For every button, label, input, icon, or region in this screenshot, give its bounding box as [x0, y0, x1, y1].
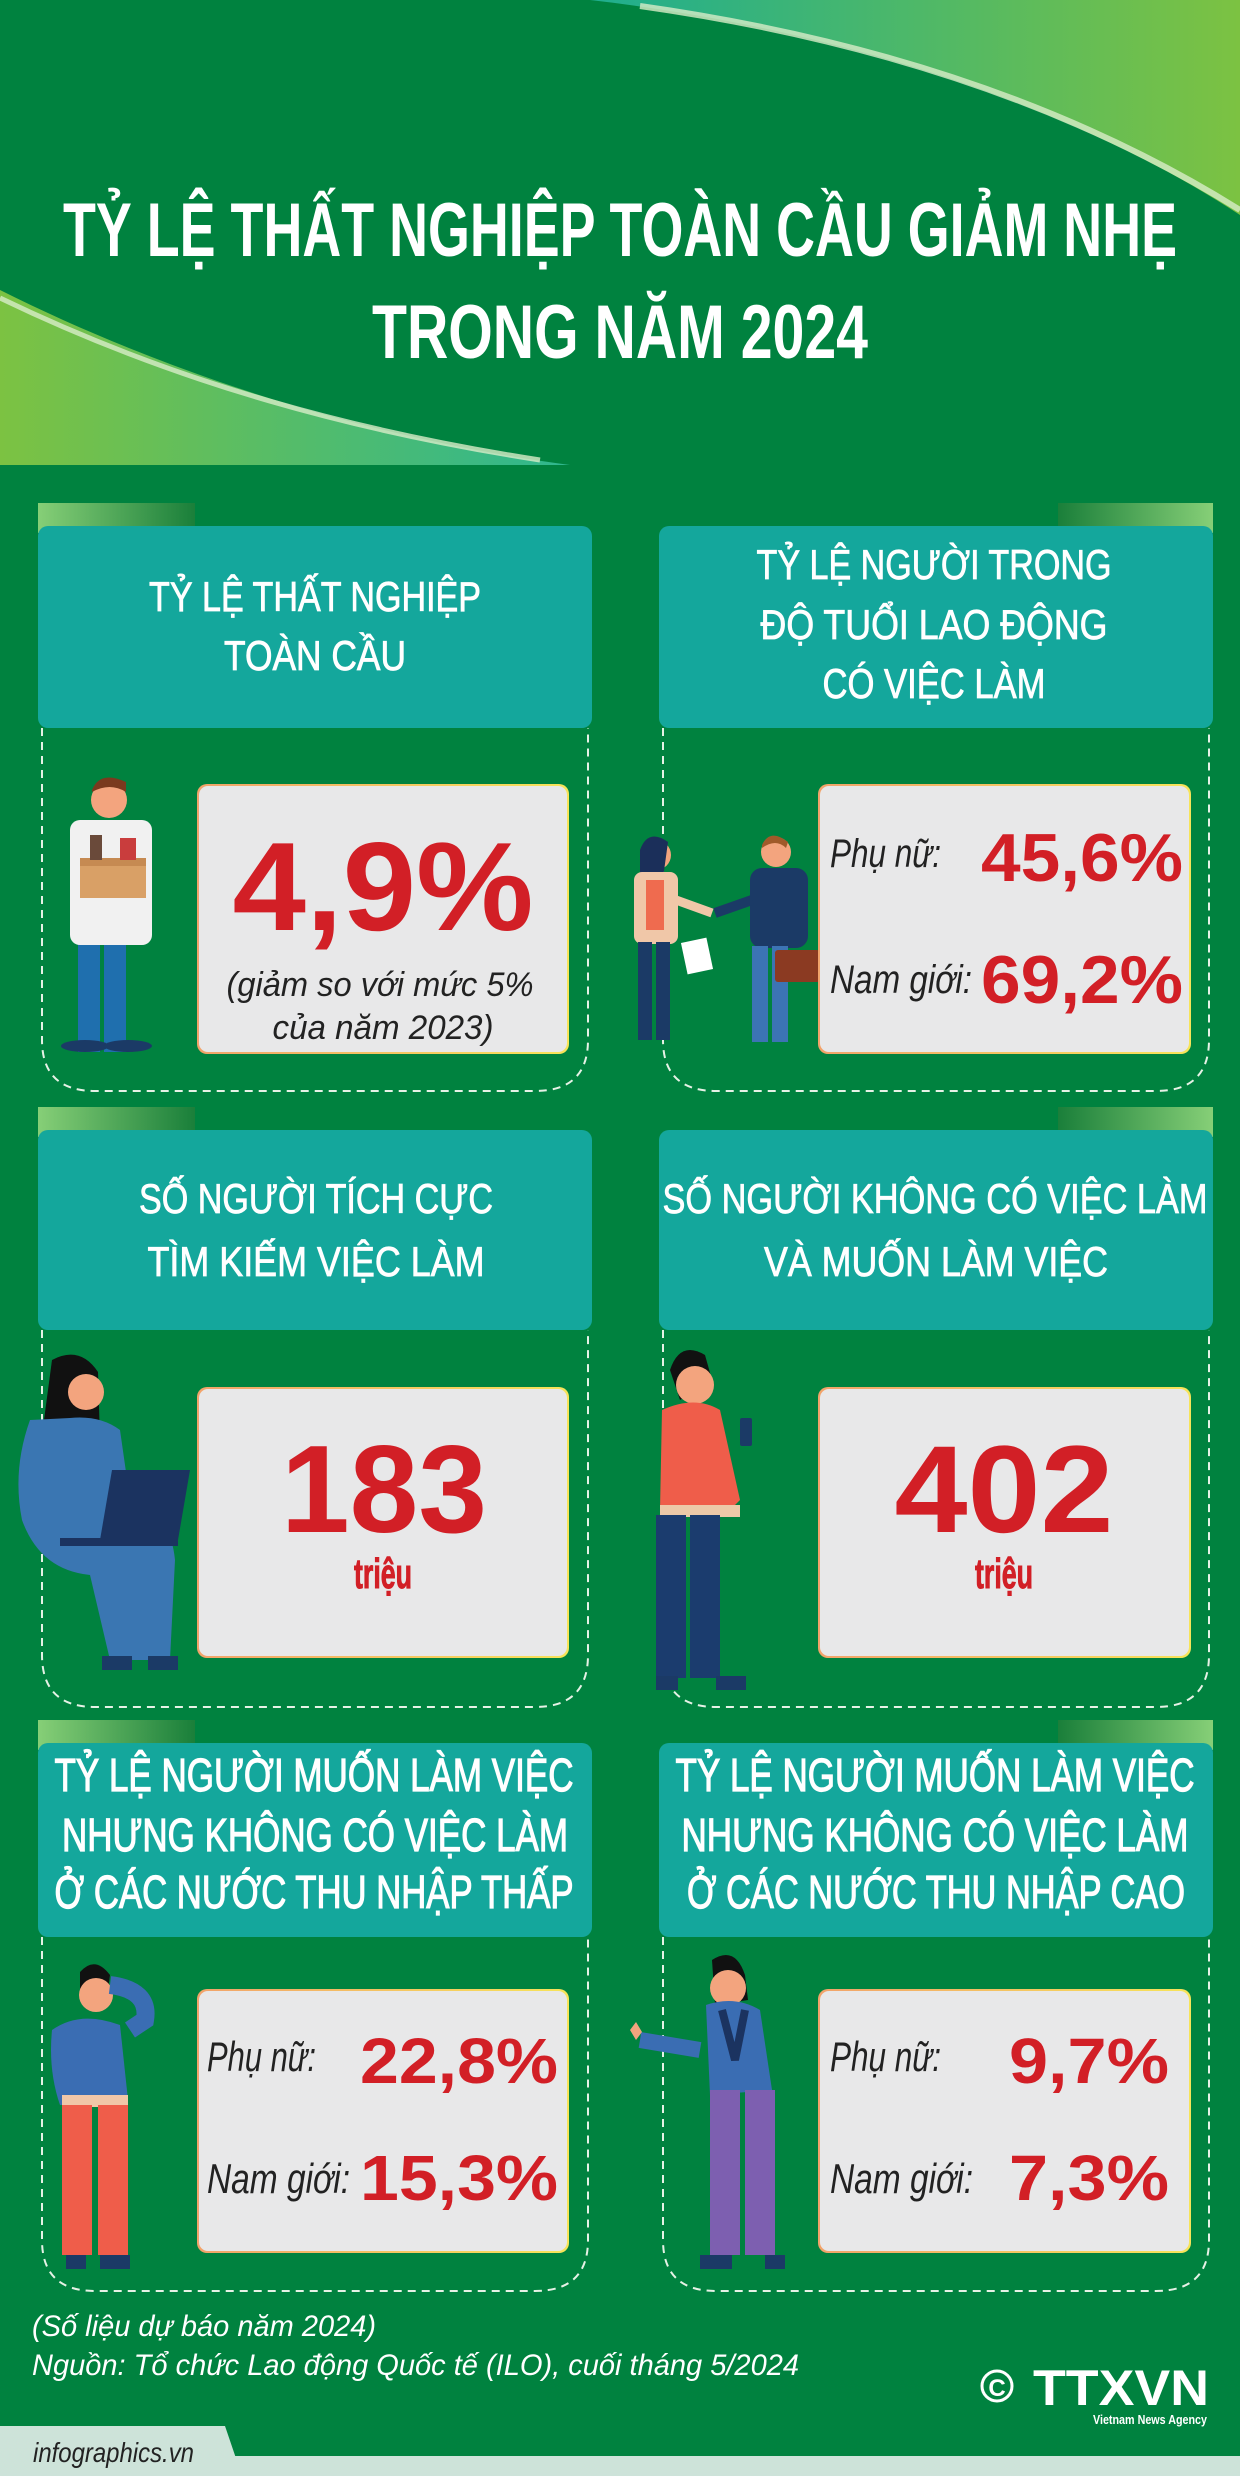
header: employed: ĐỘ TUỔI LAO ĐỘNG [760, 599, 1108, 648]
icon: woman with laptop [18, 1355, 190, 1670]
value box: 183 million [197, 1387, 569, 1658]
value box: low income values [197, 1989, 569, 2253]
header: job seekers: SỐ NGƯỜI TÍCH CỰC [139, 1174, 493, 1222]
header: high income [659, 1743, 1213, 1937]
value box: high income values: 7,3% [1009, 2142, 1169, 2214]
value box: 183 million: 183 [281, 1421, 487, 1559]
footer notes: Nguồn: Tổ chức Lao động Quốc tế (ILO), cuối tháng 5/2024 [32, 2349, 799, 2382]
header: want work: VÀ MUỐN LÀM VIỆC [764, 1237, 1108, 1285]
header: low income [38, 1743, 592, 1937]
icon: man with phone [656, 1350, 752, 1690]
logo: TTXVN: TTXVN [1033, 2360, 1209, 2416]
header: global rate: TỶ LỆ THẤT NGHIỆP [149, 572, 481, 620]
value box: low income values: Nam giới: [207, 2155, 350, 2202]
header: global rate: TOÀN CẦU [224, 632, 406, 679]
value box: 183 million: triệu [354, 1550, 412, 1597]
icon: handshake couple [634, 836, 820, 1042]
panel: low income countries [38, 1720, 592, 2291]
decoration: bottom-left swoosh [0, 290, 570, 465]
logo: TTXVN: Vietnam News Agency [1093, 2412, 1208, 2427]
value box: 4,9%: (giảm so với mức 5% [226, 966, 534, 1004]
header: want work [659, 1130, 1213, 1330]
title: TRONG NĂM 2024 [372, 290, 868, 375]
panel: high income countries [630, 1720, 1213, 2291]
value box: women/men employed: 69,2% [981, 942, 1183, 1018]
value box: women/men employed: 45,6% [981, 820, 1183, 896]
value box: high income values [818, 1989, 1191, 2253]
logo: TTXVN: C [988, 2375, 1006, 2402]
footer notes [32, 2310, 799, 2382]
value box: low income values: 22,8% [360, 2025, 558, 2097]
panel: global unemployment rate [38, 503, 592, 1091]
value box: 402 million [818, 1387, 1191, 1658]
panel: employed working age [634, 503, 1213, 1091]
header: low income: NHƯNG KHÔNG CÓ VIỆC LÀM [62, 1809, 568, 1861]
header: global rate [38, 526, 592, 728]
value box: low income values: 15,3% [360, 2142, 558, 2214]
logo: TTXVN [982, 2360, 1209, 2427]
header: low income: Ở CÁC NƯỚC THU NHẬP THẤP [54, 1866, 574, 1918]
title [63, 187, 1177, 375]
icon: waving woman [630, 1955, 785, 2269]
header: employed: CÓ VIỆC LÀM [822, 660, 1046, 707]
value box: 4,9%: của năm 2023) [272, 1009, 494, 1047]
value box: 4,9%: 4,9% [232, 816, 534, 957]
footer strip: infographics.vn: infographics.vn [33, 2437, 194, 2468]
panel: not employed but want work [656, 1107, 1213, 1707]
value box: high income values: 9,7% [1009, 2025, 1169, 2097]
icon: confused man [51, 1964, 146, 2269]
header: employed [659, 526, 1213, 728]
value box: women/men employed [818, 784, 1191, 1054]
value box: women/men employed: Nam giới: [830, 958, 972, 1002]
value box: women/men employed: Phụ nữ: [830, 832, 941, 876]
decoration: top-right swoosh [590, 0, 1240, 215]
panel: active job seekers [18, 1107, 592, 1707]
footer notes: (Số liệu dự báo năm 2024) [32, 2310, 376, 2343]
header: employed: TỶ LỆ NGƯỜI TRONG [756, 540, 1112, 588]
header: job seekers [38, 1130, 592, 1330]
value box: 4,9% [197, 784, 569, 1054]
value box: high income values: Phụ nữ: [830, 2033, 941, 2080]
footer strip: infographics.vn [0, 2426, 1240, 2476]
value box: 402 million: 402 [894, 1421, 1114, 1559]
value box: 402 million: triệu [975, 1550, 1033, 1597]
icon: man holding box [61, 778, 152, 1052]
header: low income: TỶ LỆ NGƯỜI MUỐN LÀM VIỆC [54, 1749, 574, 1801]
value box: high income values: Nam giới: [830, 2155, 973, 2202]
header: job seekers: TÌM KIẾM VIỆC LÀM [148, 1238, 484, 1285]
value box: low income values: Phụ nữ: [207, 2033, 316, 2080]
